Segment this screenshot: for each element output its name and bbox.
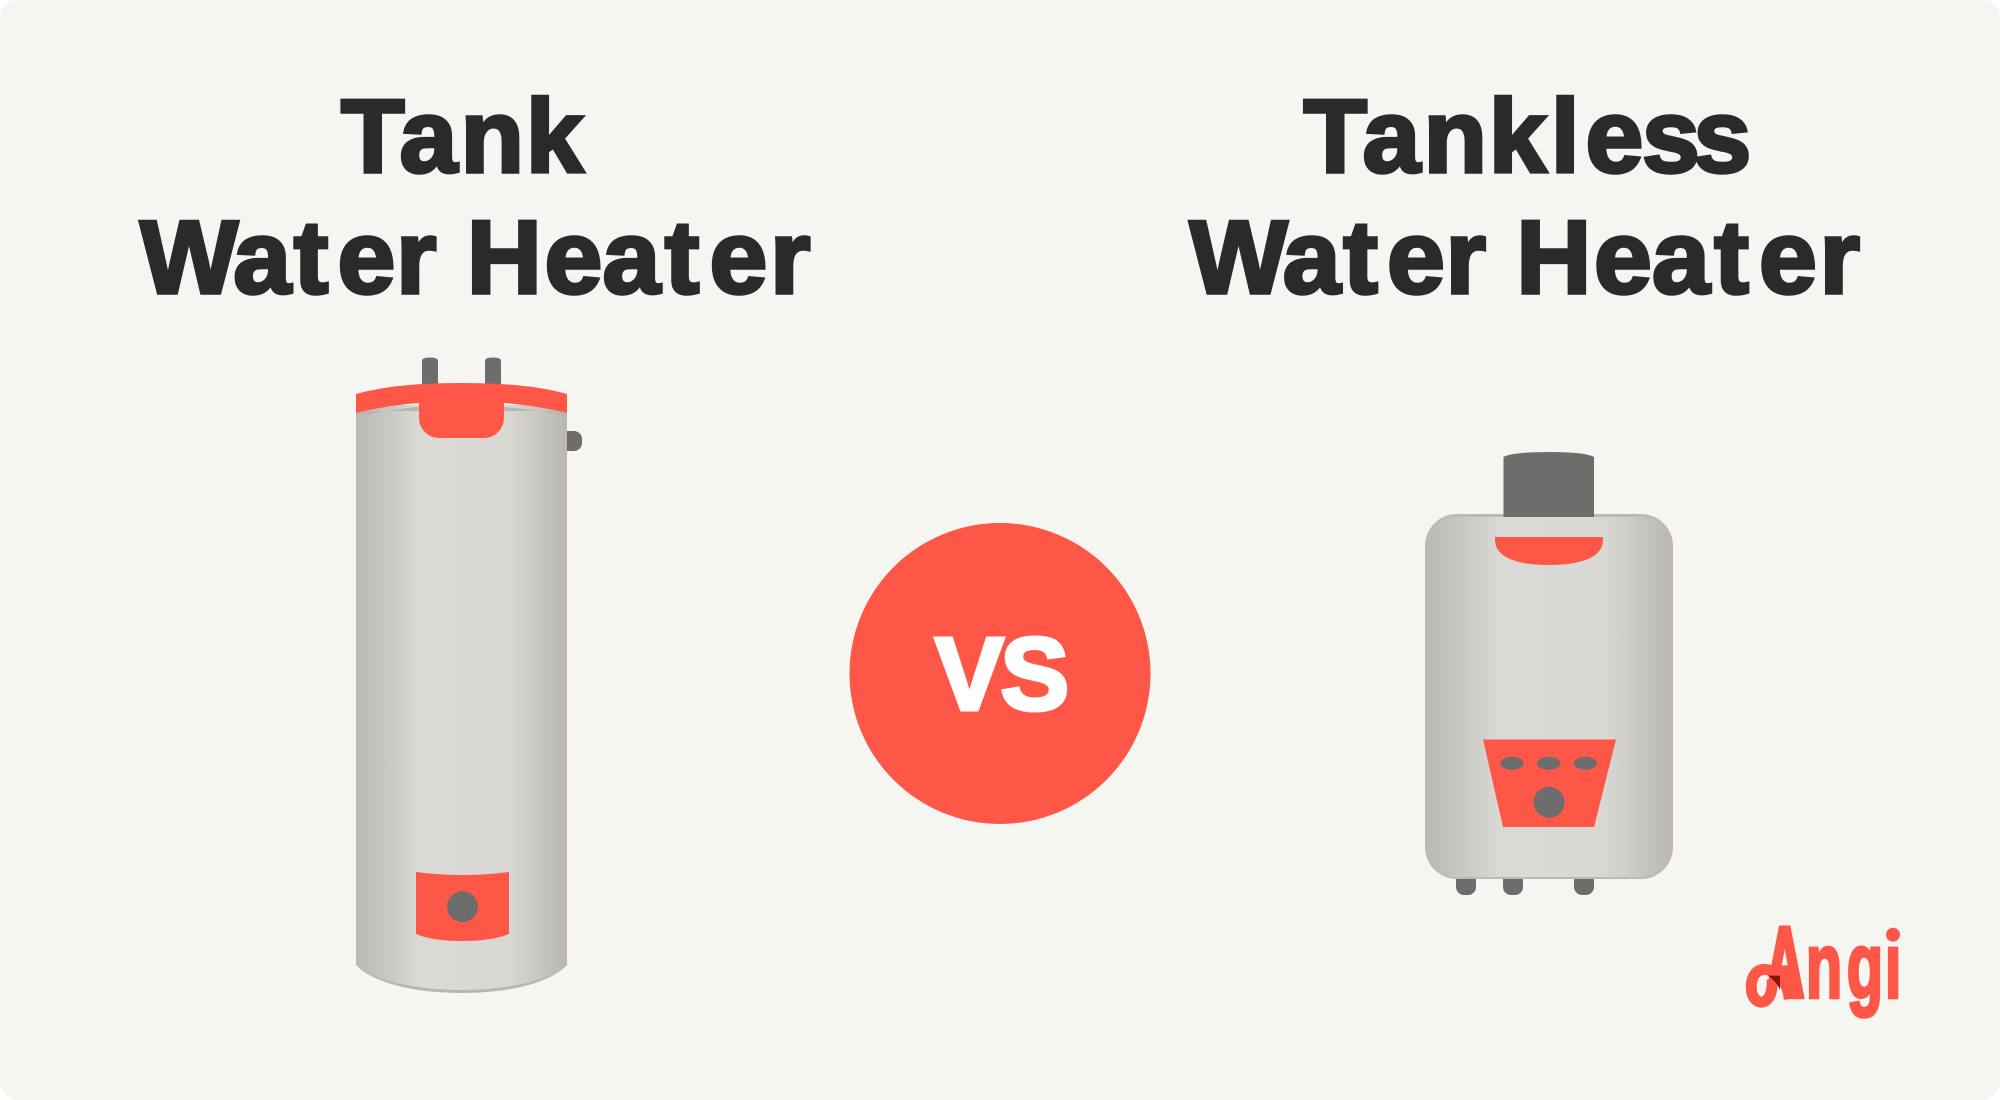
heading: tank water heater: Water Heater bbox=[140, 200, 810, 316]
vs badge: VS bbox=[935, 617, 1069, 732]
heading: tank water heater bbox=[140, 79, 810, 316]
control panel bbox=[416, 872, 509, 941]
heater body bbox=[1425, 514, 1673, 879]
red top vent bbox=[1495, 537, 1603, 565]
red top cap bbox=[356, 383, 567, 438]
icon: bottom pipes bbox=[1456, 875, 1594, 895]
vs badge bbox=[850, 523, 1150, 824]
illustration: tankless water heater bbox=[1425, 452, 1673, 895]
heading: tankless water heater bbox=[1190, 79, 1860, 316]
logo: Angi bbox=[1751, 908, 1902, 1018]
tank body bbox=[356, 405, 567, 993]
control panel bbox=[1483, 740, 1616, 827]
logo: Angi: A bbox=[1766, 908, 1804, 1017]
heading: tank water heater: Tank bbox=[341, 79, 584, 195]
logo: Angi: ngi bbox=[1806, 913, 1901, 1018]
icon: side valve bbox=[566, 431, 582, 451]
icon: top pipes bbox=[422, 358, 501, 392]
illustration: tank water heater bbox=[356, 358, 582, 993]
icon: exhaust flue bbox=[1504, 452, 1594, 518]
heading: tankless water heater: Tankless bbox=[1304, 79, 1751, 195]
heading: tankless water heater: Water Heater bbox=[1190, 200, 1860, 316]
